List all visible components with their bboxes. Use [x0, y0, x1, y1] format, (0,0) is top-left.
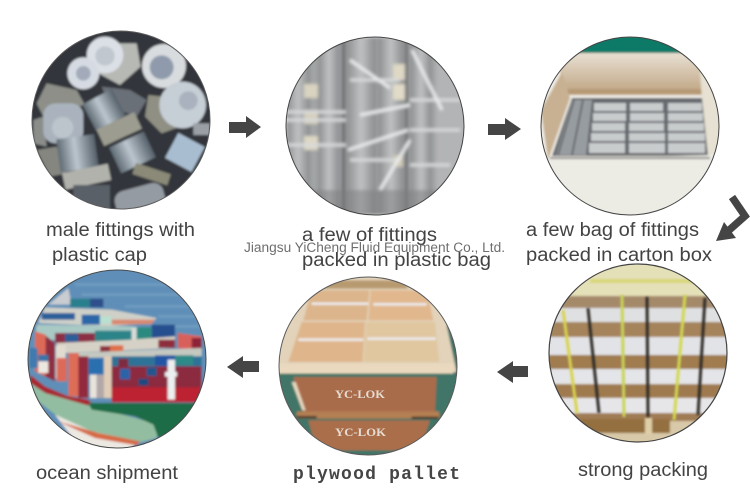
circle outline [541, 37, 719, 215]
arrow: step 4 to 5 [497, 361, 528, 383]
panel: fittings packed in plastic bag [286, 37, 491, 271]
arrow: step 2 to 3 [488, 118, 521, 140]
caption: a few bag of fittings [526, 220, 699, 241]
crate stamp lower: YC-LOK [335, 425, 387, 439]
circle outline [549, 264, 727, 442]
caption [526, 220, 713, 266]
caption: plastic cap [52, 245, 147, 266]
watermark: company name: Jiangsu YiCheng Fluid Equipment Co., Ltd. [244, 240, 505, 255]
panel: male fittings with plastic cap [30, 30, 215, 266]
caption: ocean shipment [36, 463, 179, 484]
circle outline [279, 277, 457, 455]
photo: strapped cartons [548, 264, 728, 445]
panel: ocean shipment [25, 268, 210, 484]
panel: strong packing [548, 264, 728, 481]
caption: plywood pallet [293, 465, 460, 485]
panel: bags packed in carton box [526, 36, 720, 266]
caption [302, 225, 491, 271]
caption: strong packing [578, 460, 708, 481]
caption: male fittings with [46, 220, 195, 241]
arrow: step 1 to 2 [229, 116, 261, 138]
circle outline [28, 270, 206, 448]
arrow: curved step 3 to 4 [716, 197, 745, 241]
caption [46, 220, 195, 266]
caption: packed in carton box [526, 245, 713, 266]
photo: container ship [25, 268, 210, 455]
circle outline [32, 31, 210, 209]
crate stamp: YC-LOK [335, 387, 386, 401]
caption: packed in plastic bag [302, 250, 491, 271]
photo: wooden crate [280, 278, 456, 454]
photo: open carton [540, 36, 720, 216]
photo: plastic bags [286, 37, 466, 215]
circle outline [286, 37, 464, 215]
arrow: step 5 to 6 [227, 356, 259, 378]
panel: plywood pallet [278, 276, 458, 483]
caption: a few of fittings [302, 225, 437, 246]
photo: fittings with caps [32, 32, 210, 208]
